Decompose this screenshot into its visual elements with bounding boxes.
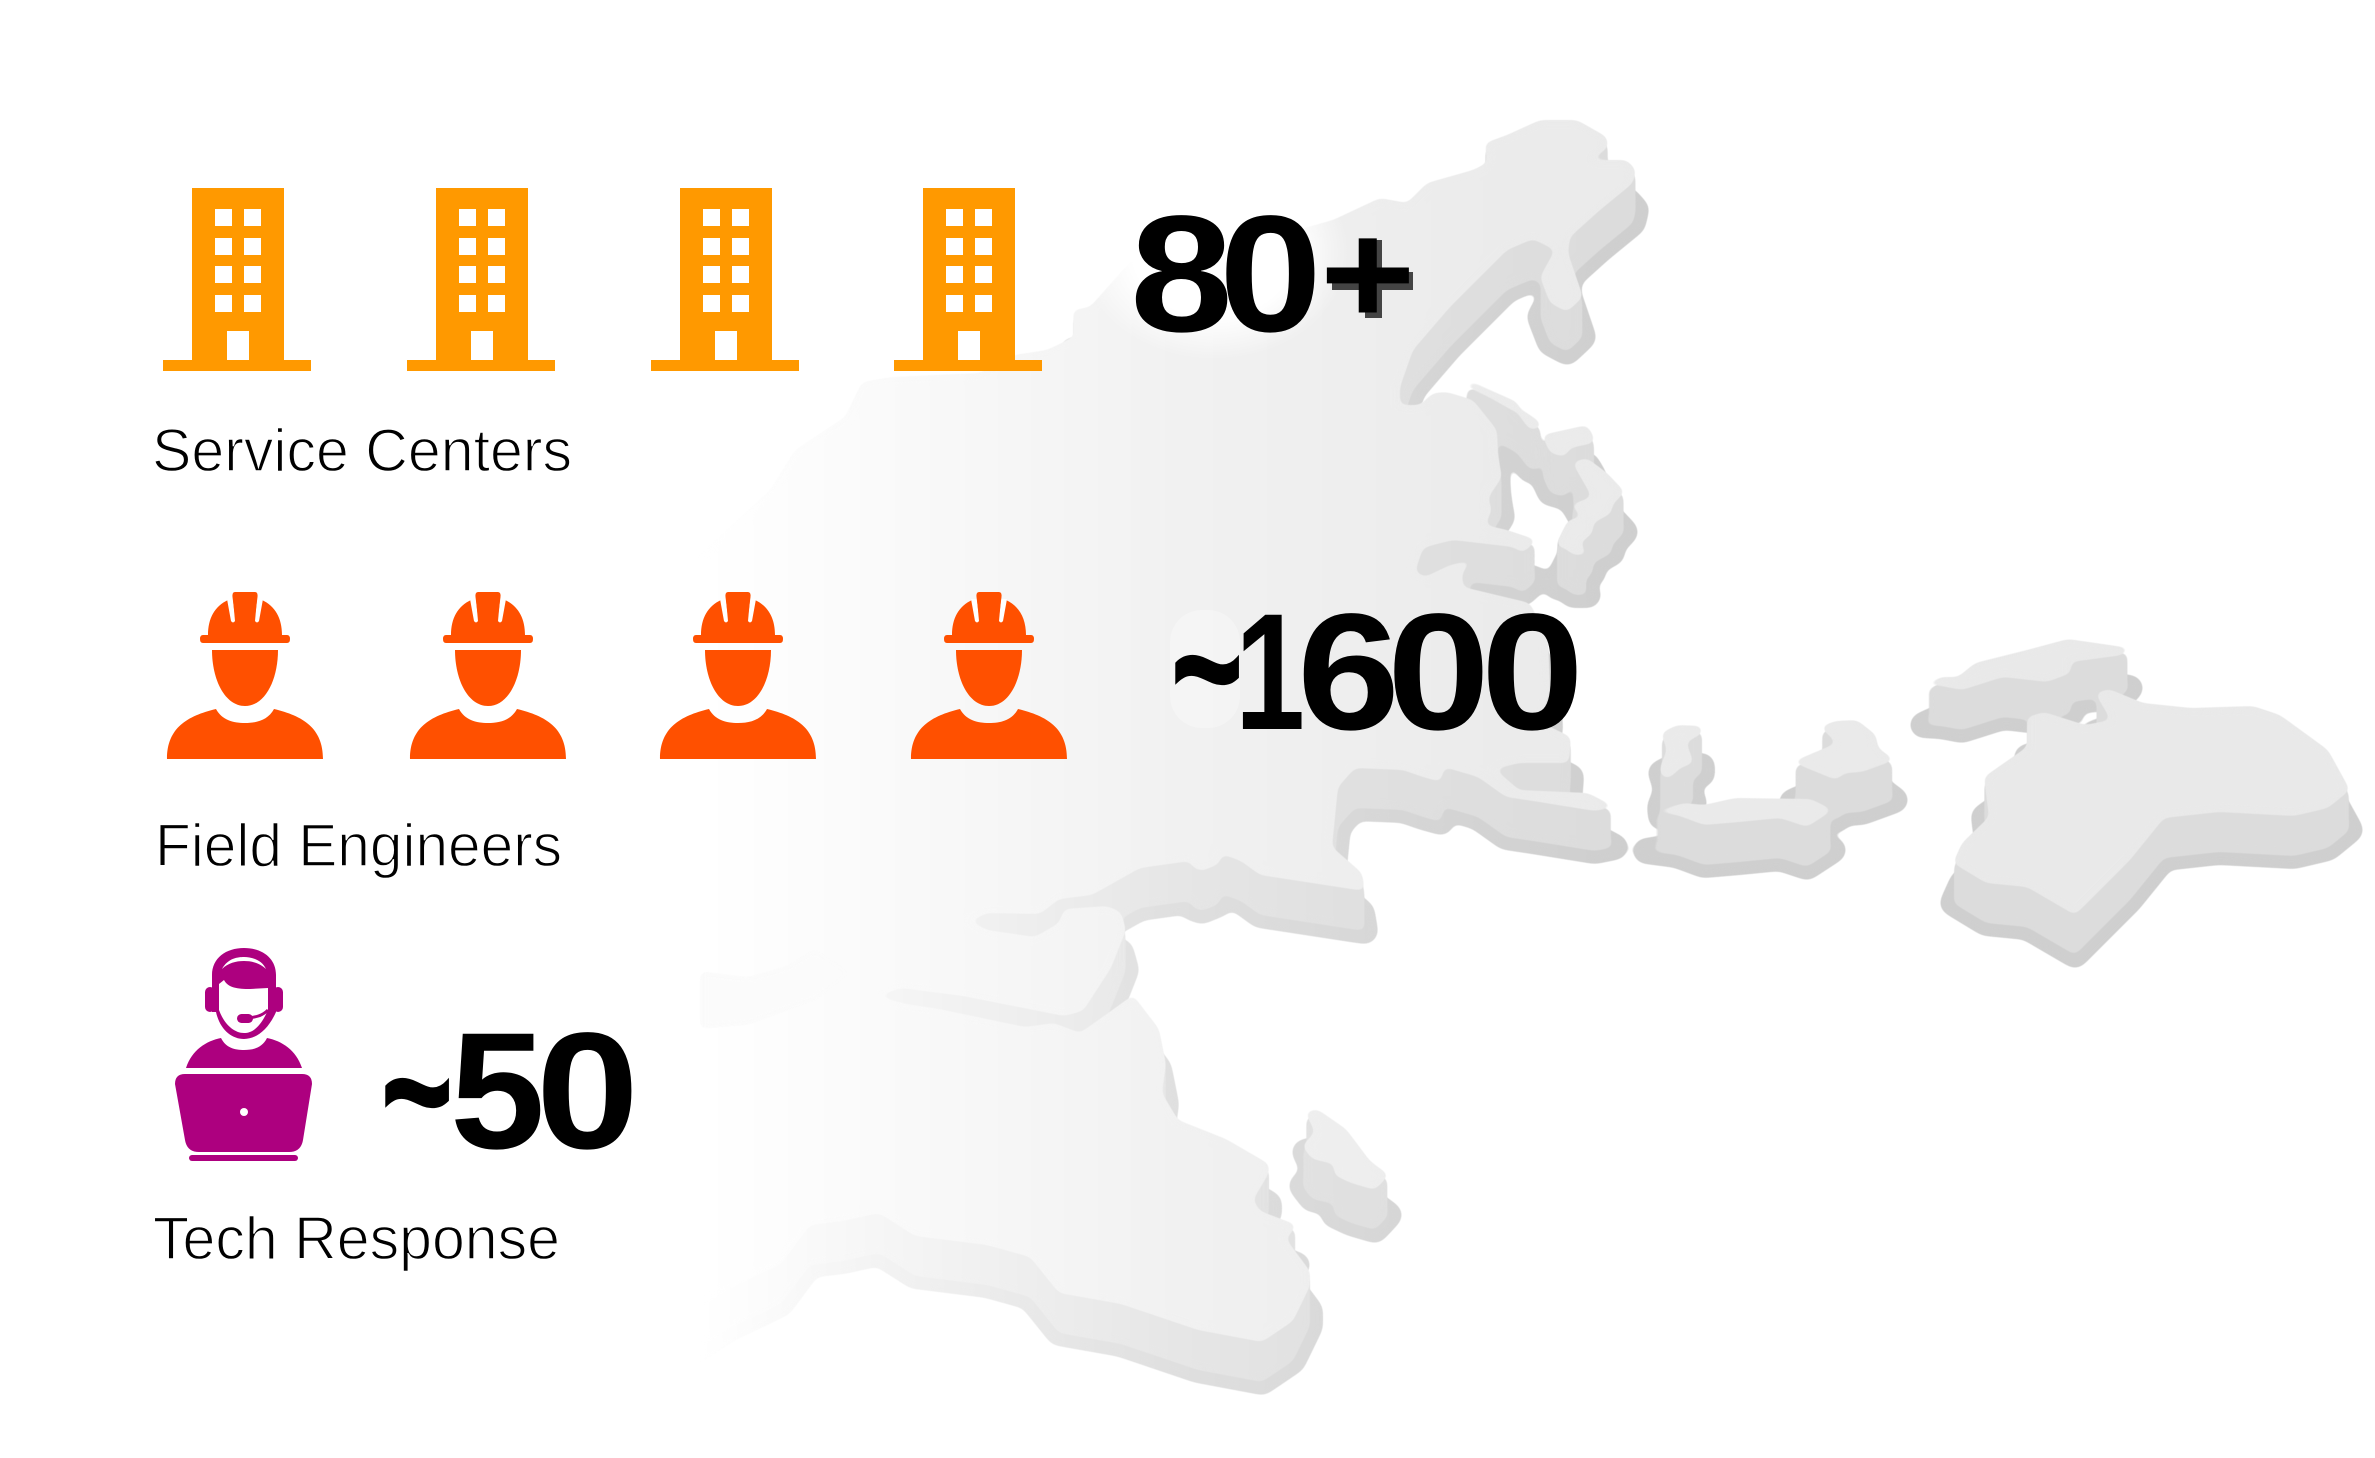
label: Service Centers: Service Centers — [152, 417, 572, 484]
number: ~1600: 0 — [1481, 580, 1584, 765]
row: service center buildings — [163, 188, 1042, 371]
number: 80+: 8 — [1130, 182, 1233, 367]
row: field engineer icons — [167, 592, 1067, 759]
number: ~50: 5 — [450, 999, 545, 1184]
number: ~50: 0 — [536, 999, 639, 1184]
number: 80+: + — [1320, 192, 1416, 355]
number: ~1600: 6 — [1297, 580, 1400, 765]
number: ~50: ~ — [382, 999, 452, 1184]
number: ~1600: 0 — [1387, 580, 1490, 765]
icon: tech support agent with laptop — [175, 948, 312, 1161]
label: Tech Response: Tech Response — [153, 1205, 560, 1272]
map: grey isometric landmass and islands — [650, 120, 2350, 1382]
number: 80+ — [1130, 182, 1416, 367]
label: Field Engineers: Field Engineers — [155, 812, 562, 879]
number: ~1600: 1 — [1235, 580, 1305, 765]
number: 80+: 0 — [1219, 182, 1322, 367]
number: ~1600: ~ — [1172, 576, 1242, 761]
